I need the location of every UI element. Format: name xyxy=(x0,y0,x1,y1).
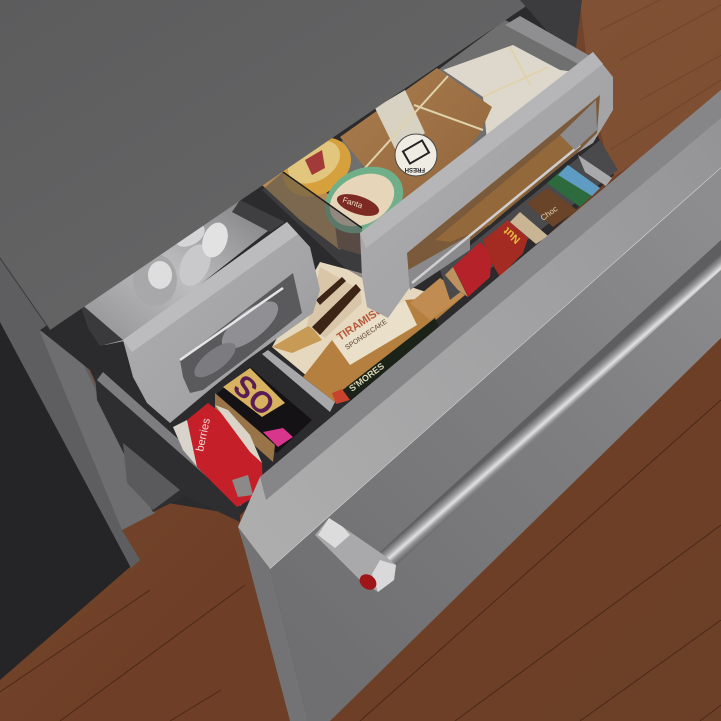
dark cabinet side panel xyxy=(0,300,138,680)
bottom compartment: dark box with gold label xyxy=(215,367,312,462)
fresh sticker: FRESH xyxy=(405,166,425,172)
bottom compartment: dark box with gold label: OS xyxy=(227,368,282,421)
upper freezer door xyxy=(0,0,535,330)
small grocery boxes: Nut xyxy=(501,224,523,246)
drawer interior xyxy=(40,0,614,522)
fresh sticker xyxy=(395,134,437,176)
left bin handle xyxy=(123,222,320,423)
tiramisu box and cake xyxy=(272,262,465,404)
tiramisu box and cake: TIRAMISU xyxy=(335,304,386,343)
drawer front lip xyxy=(238,90,721,569)
handle post with red badge xyxy=(315,518,396,593)
ice bin contents xyxy=(80,200,285,346)
left bin window xyxy=(180,273,302,393)
ice cream tubs xyxy=(262,126,415,255)
fridge side trim strip xyxy=(0,250,155,568)
bottom compartment divider xyxy=(262,350,335,412)
drawer front panel xyxy=(270,168,721,721)
red frozen berries bag: berries xyxy=(194,417,213,453)
red frozen berries bag xyxy=(173,403,263,507)
tiramisu box and cake: S'MORES xyxy=(347,361,386,394)
right basket contents: wrapped packages xyxy=(330,20,600,270)
drawer handle bar xyxy=(380,240,721,568)
cabinet post top right xyxy=(505,0,590,66)
right basket frame xyxy=(262,172,362,278)
small grocery boxes: Choc xyxy=(539,204,559,223)
tiramisu box and cake: SPONGECAKE xyxy=(344,318,389,352)
small grocery boxes xyxy=(440,140,618,300)
red badge xyxy=(357,571,379,593)
drawer side edge xyxy=(238,527,308,721)
right bin window xyxy=(407,95,600,290)
right bin handle xyxy=(360,52,613,318)
ice cream tubs: Fanta xyxy=(341,195,364,210)
